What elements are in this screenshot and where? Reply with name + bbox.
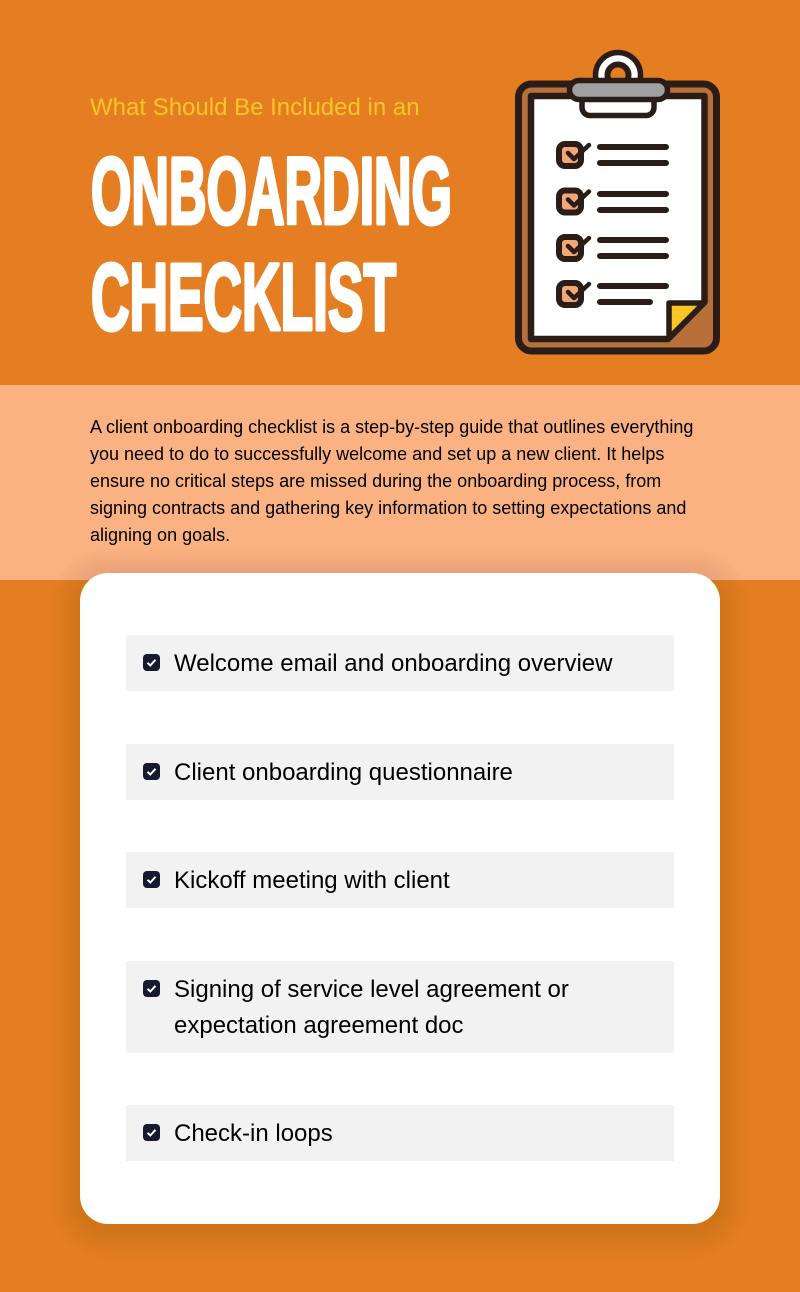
checklist item 1 <box>126 635 674 691</box>
ring <box>596 52 640 98</box>
checklist boxes <box>559 144 581 305</box>
checklist item 5 <box>126 1105 674 1161</box>
checklist item 4 <box>126 961 674 1053</box>
intro text: aligning on goals. <box>90 525 230 545</box>
intro text <box>90 417 693 545</box>
checklist item 4: Signing of service level agreement or <box>174 976 569 1003</box>
checklist item 4: expectation agreement doc <box>174 1012 464 1039</box>
panel: checklist card <box>80 573 720 1224</box>
card shadow <box>62 561 738 1248</box>
intro text: you need to do to successfully welcome and set up a new client. It helps <box>90 444 664 464</box>
intro text: ensure no critical steps are missed during the onboarding process, from <box>90 471 661 491</box>
checklist lines <box>600 147 666 302</box>
page fold <box>669 303 704 338</box>
checklist item 3: Kickoff meeting with client <box>174 867 450 894</box>
paper <box>531 96 704 339</box>
panel: intro band <box>0 385 800 580</box>
checklist item 1: Welcome email and onboarding overview <box>174 650 612 677</box>
checklist item 2 <box>126 744 674 800</box>
intro text: A client onboarding checklist is a step-by-step guide that outlines everything <box>90 417 693 437</box>
checklist item 3 <box>126 852 674 908</box>
checklist item 2: Client onboarding questionnaire <box>174 759 513 786</box>
icon: clipboard with checklist <box>515 50 720 354</box>
board <box>518 84 716 351</box>
check marks <box>568 145 589 298</box>
checklist item 5: Check-in loops <box>174 1120 333 1147</box>
clip lower <box>582 90 654 116</box>
intro text: signing contracts and gathering key information to setting expectations and <box>90 498 686 518</box>
clip bar <box>570 80 668 100</box>
heading: subtitle: What Should Be Included in an <box>90 94 420 121</box>
heading: main title <box>91 140 452 350</box>
